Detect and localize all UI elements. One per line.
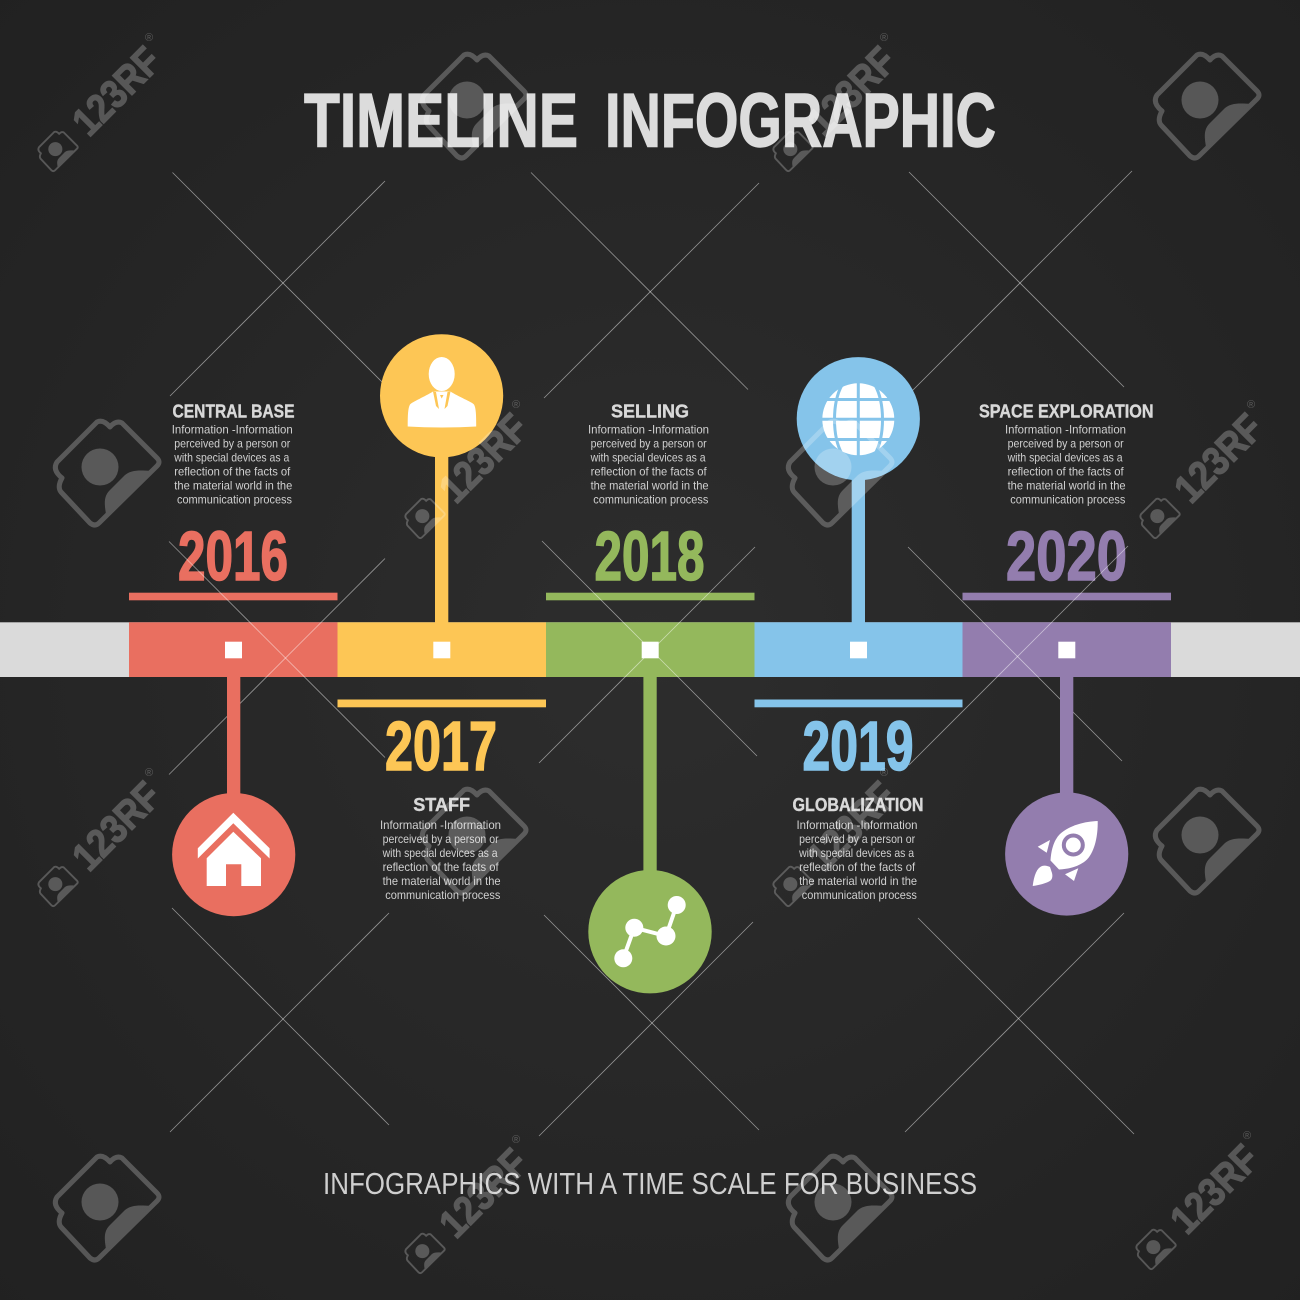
description: central base — [172, 422, 293, 506]
watermarks: 123RF — [799, 39, 905, 144]
description: selling: with special devices as a — [590, 450, 706, 464]
panel: 2020 text — [962, 401, 1171, 600]
description: space exploration: perceived by a person or — [1008, 436, 1124, 450]
description: globalization: the material world in the — [799, 874, 917, 888]
description: staff — [380, 818, 501, 902]
year rule: 2020 — [962, 593, 1171, 600]
subtitle: INFOGRAPHICS WITH A TIME SCALE FOR BUSINESS — [323, 1166, 977, 1201]
timeline bar — [0, 622, 1300, 677]
description: space exploration: reflection of the facts of — [1008, 464, 1124, 478]
heading: selling: SELLING — [611, 401, 689, 422]
icon: rocket — [1033, 821, 1098, 886]
description: central base: Information -Information — [172, 422, 293, 436]
year: 2016: 2016 — [178, 517, 288, 595]
title: TIMELINE — [304, 79, 578, 164]
watermarks: 123RF — [1166, 406, 1272, 511]
watermarks: 123RF — [431, 1141, 537, 1246]
description: staff: Information -Information — [380, 818, 501, 832]
watermarks: 123RF — [64, 774, 170, 879]
description: central base: the material world in the — [174, 478, 293, 492]
icon: businessman — [408, 357, 476, 427]
marker: 2018 network — [588, 677, 712, 993]
description: space exploration — [1005, 422, 1126, 506]
watermarks: ® — [512, 399, 520, 411]
watermarks: 123RF — [1162, 1137, 1268, 1242]
description: central base: communication process — [177, 492, 292, 506]
icon: globe — [821, 382, 896, 457]
description: staff: perceived by a person or — [383, 832, 499, 846]
year: 2020: 2020 — [1006, 517, 1127, 595]
year rule: 2017 — [338, 700, 546, 707]
description: central base: with special devices as a — [173, 450, 290, 464]
title: INFOGRAPHIC — [605, 79, 996, 164]
panel: 2019 text — [754, 700, 962, 902]
description: selling — [588, 422, 709, 506]
title — [304, 79, 996, 164]
marker: 2020 rocket — [1005, 677, 1128, 916]
description: globalization: perceived by a person or — [799, 832, 915, 846]
description: selling: the material world in the — [591, 478, 709, 492]
description: staff: reflection of the facts of — [383, 860, 499, 874]
panel: 2017 text — [338, 700, 546, 902]
year rule: 2016 — [129, 593, 338, 600]
watermarks: 123RF — [64, 39, 170, 144]
marker: 2019 globe — [797, 357, 920, 622]
panel: 2016 text — [129, 401, 338, 600]
heading: central base: CENTRAL BASE — [172, 401, 294, 422]
description: globalization: with special devices as a — [798, 846, 914, 860]
description: selling: communication process — [593, 492, 708, 506]
description: space exploration: communication process — [1010, 492, 1125, 506]
watermarks: 123RF — [431, 406, 537, 511]
year: 2018: 2018 — [594, 517, 704, 595]
description: selling: perceived by a person or — [591, 436, 707, 450]
description: staff: the material world in the — [383, 874, 501, 888]
description: globalization: reflection of the facts of — [799, 860, 916, 874]
heading: space exploration: SPACE EXPLORATION — [979, 401, 1154, 422]
year: 2019: 2019 — [802, 707, 914, 785]
year: 2017: 2017 — [385, 707, 497, 785]
description: central base: reflection of the facts of — [174, 464, 291, 478]
heading: staff: STAFF — [413, 794, 470, 815]
description: globalization: communication process — [802, 888, 917, 902]
marker: 2017 person — [380, 334, 503, 622]
description: space exploration: the material world in the — [1008, 478, 1126, 492]
description: selling: Information -Information — [588, 422, 709, 436]
watermarks: ® — [880, 767, 888, 779]
description: staff: with special devices as a — [382, 846, 498, 860]
watermarks: ® — [1247, 399, 1255, 411]
description: selling: reflection of the facts of — [591, 464, 707, 478]
watermarks: ® — [145, 767, 153, 779]
watermarks: ® — [512, 1134, 520, 1146]
year rule: 2018 — [546, 593, 754, 600]
description: space exploration: Information -Information — [1005, 422, 1126, 436]
icon: house — [198, 813, 270, 886]
watermarks: ® — [145, 32, 153, 44]
watermarks: ® — [1243, 1130, 1251, 1142]
year rule: 2019 — [754, 700, 962, 707]
heading: globalization: GLOBALIZATION — [792, 794, 924, 815]
watermarks: 123RF — [799, 774, 905, 879]
watermarks: ® — [880, 32, 888, 44]
description: staff: communication process — [385, 888, 500, 902]
panel: 2018 text — [546, 401, 754, 600]
description: globalization: Information -Information — [796, 818, 918, 832]
marker: 2016 house — [172, 677, 295, 916]
description: globalization — [796, 818, 918, 902]
description: central base: perceived by a person or — [174, 436, 290, 450]
icon: connected nodes — [614, 896, 686, 967]
description: space exploration: with special devices as a — [1007, 450, 1123, 464]
